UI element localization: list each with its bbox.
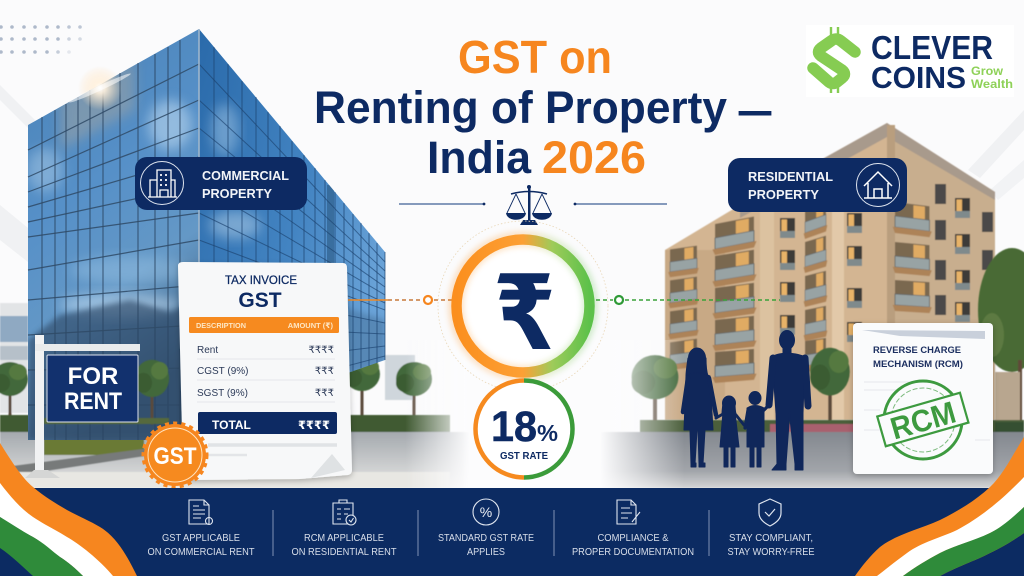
woman (683, 348, 716, 467)
bottom band (0, 488, 1024, 576)
family silhouette (683, 330, 808, 470)
invoice header row: DESCRIPTION (196, 321, 246, 330)
18% GST rate badge (476, 380, 572, 478)
GST seal badge: GST (154, 443, 197, 470)
GST seal badge (144, 424, 206, 486)
icon: document (189, 500, 212, 524)
feature: RCM on residential rent: RCM APPLICABLE (304, 533, 384, 544)
feature: RCM on residential rent (292, 500, 396, 558)
dot pattern (0, 25, 82, 54)
feature: standard GST rate (438, 499, 534, 558)
rupee ring (438, 221, 608, 391)
for rent sign: FOR (68, 363, 118, 390)
trees and hedge in front of commercial building (44, 360, 169, 425)
scales icon with rules (399, 185, 667, 225)
invoice total (198, 412, 337, 434)
title: 2026 (542, 132, 646, 183)
label: commercial property: PROPERTY (202, 186, 272, 201)
street scene: left ground and background buildings (0, 303, 480, 488)
logo: Clever Coins: Grow (971, 66, 1003, 78)
18% GST rate badge: GST RATE (500, 450, 548, 462)
feature: GST on commercial rent: GST APPLICABLE (162, 533, 240, 544)
invoice rows: ₹₹₹ (315, 388, 334, 399)
label: commercial property (135, 157, 307, 210)
invoice total: ₹₹₹₹ (298, 420, 330, 432)
invoice rows: CGST (9%) (197, 366, 248, 377)
icon: document with pen (617, 500, 640, 524)
connector: orange to invoice (348, 296, 452, 304)
tax invoice card (178, 262, 352, 480)
tricolour ribbon: right (855, 437, 1024, 576)
rupee symbol: ₹ (490, 255, 564, 371)
feature: compliance: PROPER DOCUMENTATION (572, 547, 694, 558)
man (769, 330, 808, 470)
feature: GST on commercial rent (148, 500, 254, 558)
title: — (739, 90, 771, 131)
boy (745, 392, 769, 467)
for rent sign: RENT (64, 388, 122, 415)
girl (716, 396, 744, 467)
feature: RCM on residential rent: ON RESIDENTIAL RENT (292, 547, 396, 558)
feature: standard GST rate: STANDARD GST RATE (438, 533, 534, 544)
label: residential property (728, 158, 907, 212)
label: residential property: RESIDENTIAL (748, 169, 833, 184)
feature: compliance (572, 500, 694, 558)
invoice header row: AMOUNT (₹) (288, 321, 333, 330)
RCM card (853, 323, 993, 474)
tricolour ribbon: left (0, 443, 137, 576)
invoice rows: SGST (9%) (197, 388, 248, 399)
label: commercial property: COMMERCIAL (202, 168, 289, 183)
RCM card: MECHANISM (RCM) (873, 359, 963, 370)
feature: standard GST rate: APPLIES (467, 547, 505, 558)
residential building (665, 123, 995, 420)
connector: green to residential (596, 296, 780, 304)
18% GST rate badge: % (537, 420, 558, 446)
street scene: right ground, trees and hedges (590, 248, 1024, 488)
18% GST rate badge: 18 (491, 403, 537, 451)
icon: house (864, 172, 892, 198)
icon: office building (148, 170, 177, 197)
label: residential property: PROPERTY (748, 187, 819, 202)
title: GST on (458, 31, 612, 83)
commercial glass building (27, 29, 385, 440)
feature: stay compliant: STAY WORRY-FREE (728, 547, 815, 558)
invoice header row (189, 317, 339, 333)
icon: percent: % (480, 504, 492, 520)
invoice rows: Rent (197, 345, 218, 356)
title: India (427, 132, 532, 183)
central white fade (405, 340, 685, 490)
feature: GST on commercial rent: ON COMMERCIAL RENT (148, 547, 254, 558)
bottom dividers (273, 510, 709, 556)
RCM stamp (877, 381, 969, 459)
logo: Clever Coins: COINS (871, 60, 966, 95)
invoice rows: ₹₹₹₹ (309, 345, 334, 356)
logo: Clever Coins (806, 25, 1014, 97)
logo: Clever Coins: Wealth (971, 79, 1013, 91)
invoice total: TOTAL (212, 418, 251, 432)
title (314, 31, 771, 183)
icon: clipboard (333, 500, 356, 525)
RCM stamp: RCM (887, 395, 960, 446)
RCM card: REVERSE CHARGE (873, 345, 962, 356)
invoice rows (197, 345, 335, 402)
feature: compliance: COMPLIANCE & (598, 533, 669, 544)
for rent sign (25, 335, 140, 478)
feature: stay compliant (728, 499, 815, 558)
feature: stay compliant: STAY COMPLIANT, (729, 533, 813, 544)
tax invoice card: GST (238, 289, 282, 312)
icon: shield check (759, 499, 781, 526)
title: Renting of Property (314, 82, 727, 133)
tax invoice card: TAX INVOICE (225, 273, 297, 287)
invoice rows: ₹₹₹ (315, 366, 334, 377)
logo: Clever Coins: CLEVER (871, 29, 993, 66)
